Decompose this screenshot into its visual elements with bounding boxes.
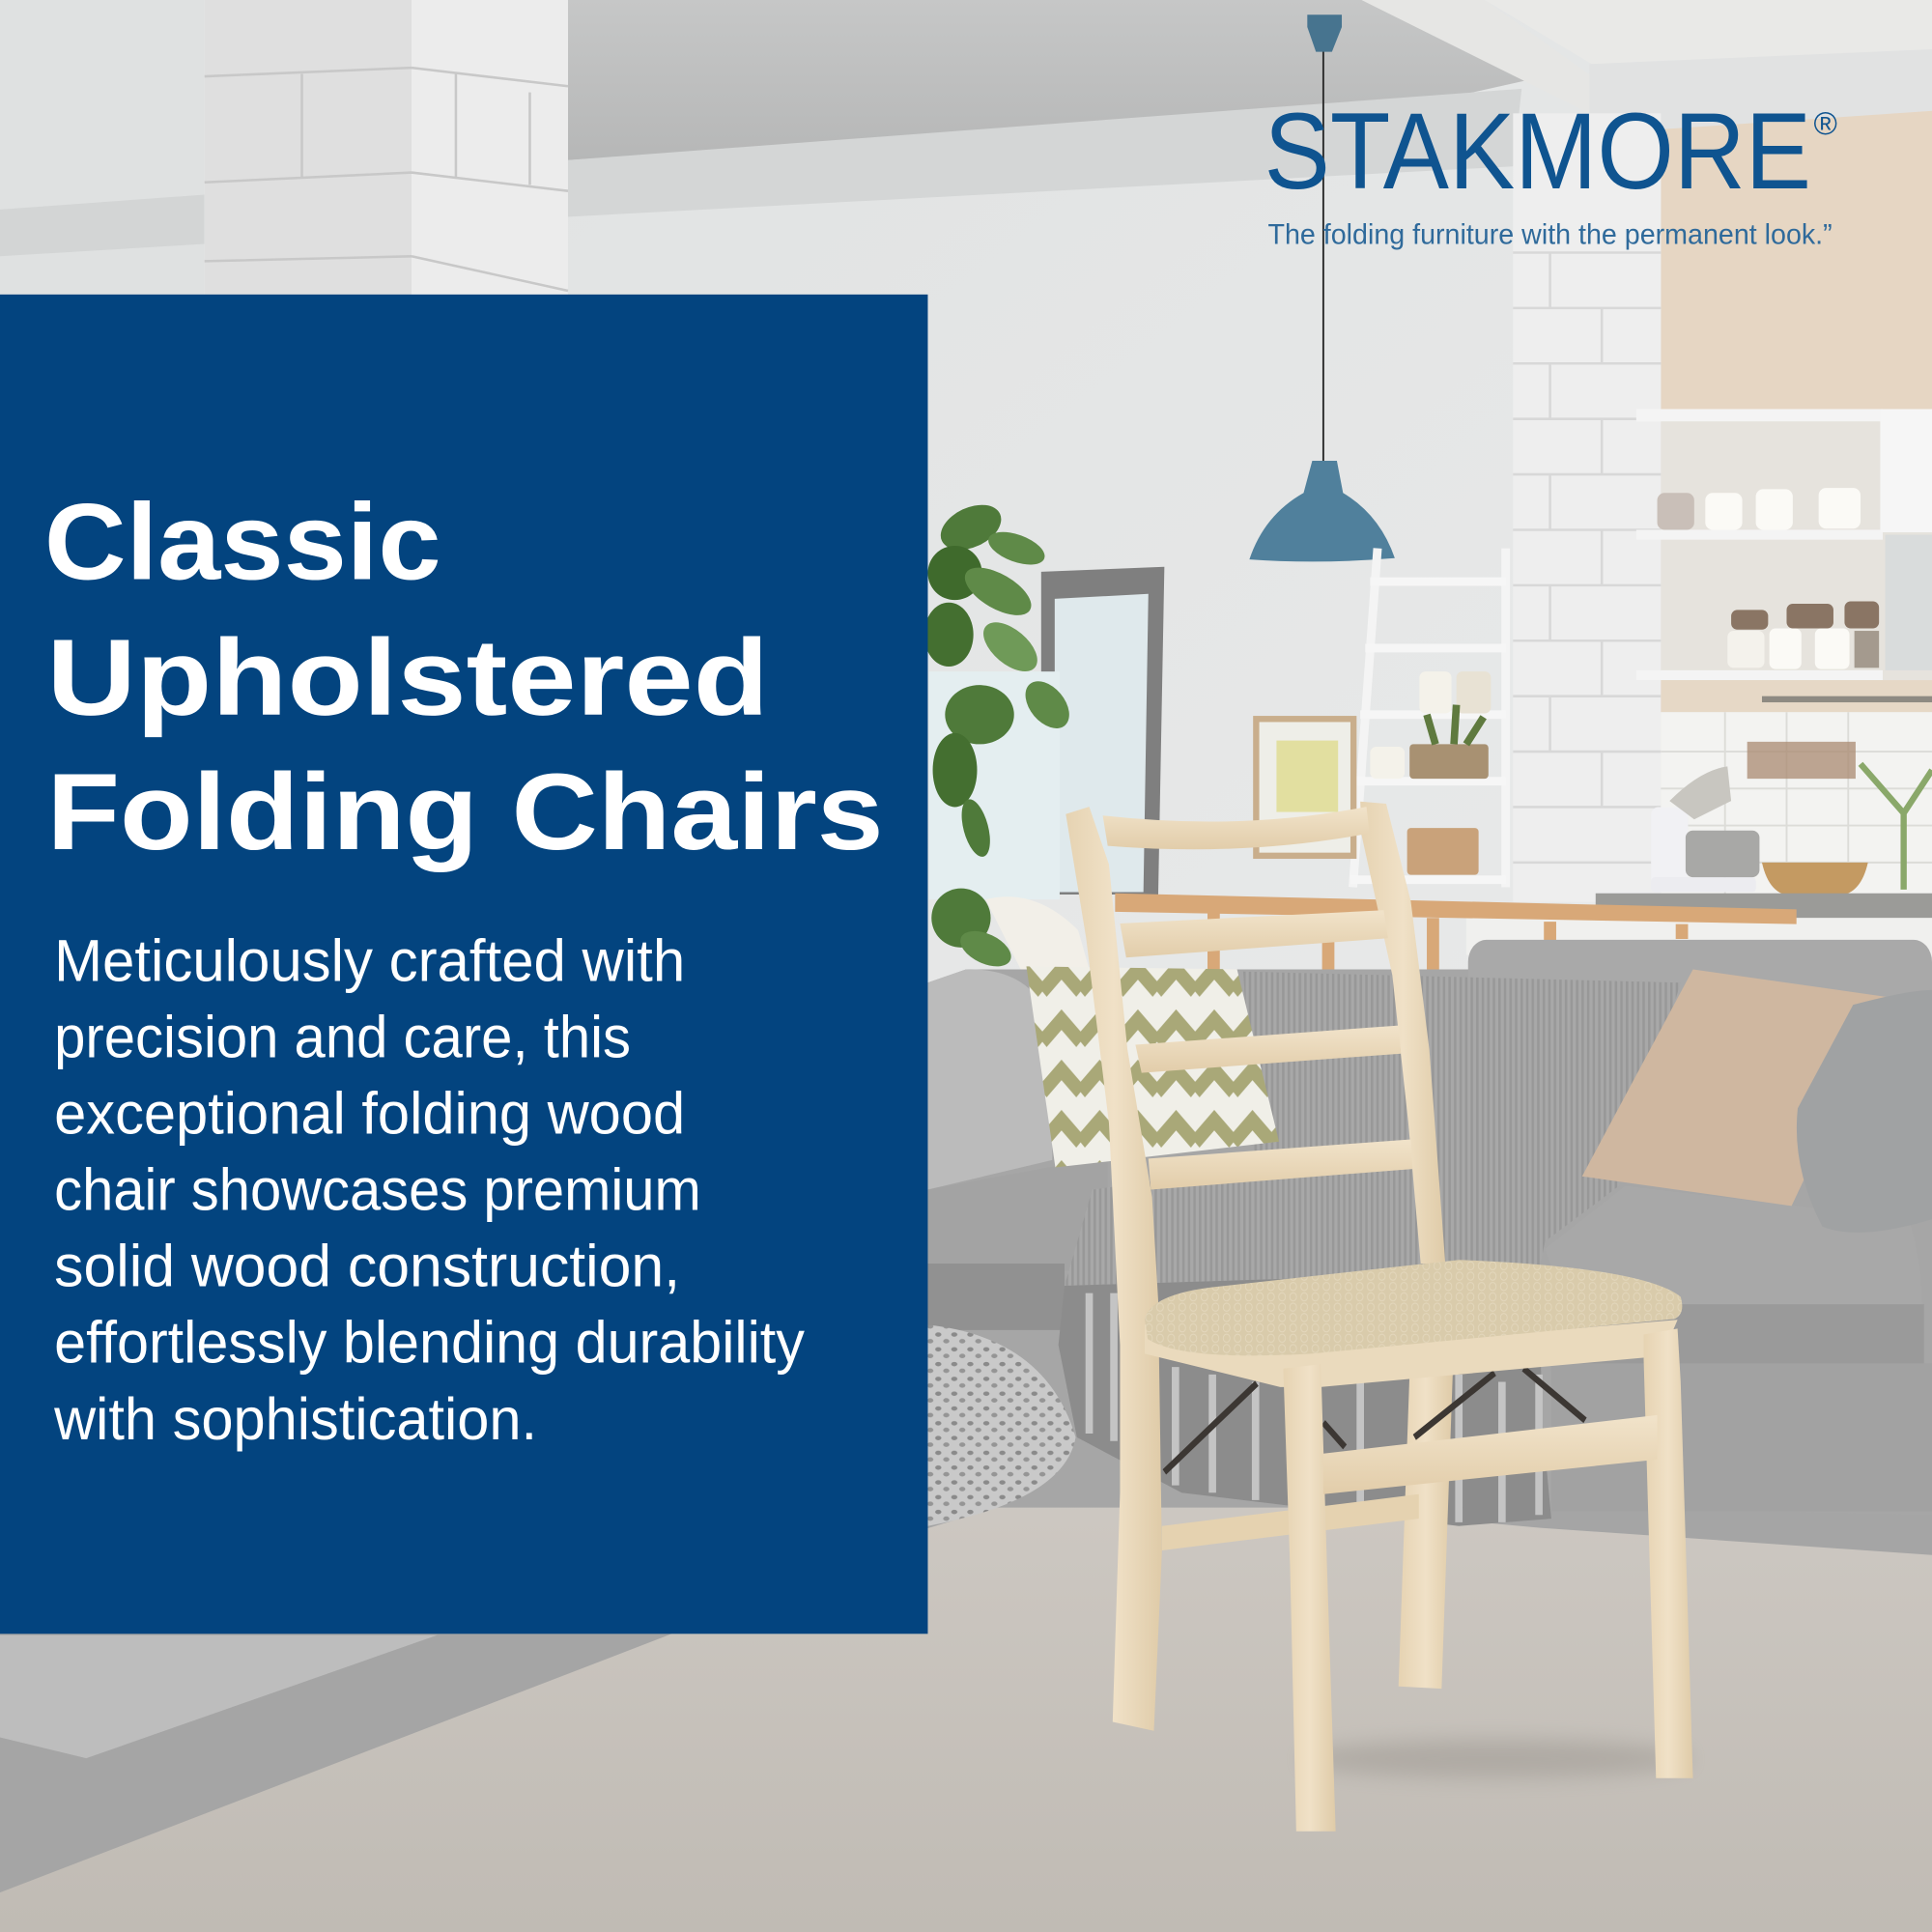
grey sofa [927,940,1932,1515]
title: Folding Chairs [46,751,884,872]
ladder shelf [1346,549,1506,887]
blue text panel [0,295,927,1634]
right ceiling [1485,0,1932,64]
chair [1065,802,1693,1832]
ceiling beam [567,89,1521,216]
knitted pouf [927,1325,1076,1526]
kitchen counter [1596,894,1932,918]
sofa and chair layer [927,802,1932,1832]
left ceiling area [0,0,205,296]
backsplash [1661,680,1932,895]
rug [0,1485,1932,1932]
description: Meticulously crafted with [54,927,685,993]
description: with sophistication. [53,1386,537,1452]
knitted throw [1059,972,1681,1526]
peach wall [1661,111,1932,419]
title [44,480,884,872]
third slat [1135,1026,1401,1073]
title: Classic [44,480,441,602]
top slat [1103,807,1370,849]
logo [1264,90,1837,251]
foreground sofa corner [0,1635,438,1758]
seat frame [1145,1320,1678,1387]
second slat [1120,910,1388,957]
kitchen shelves [1636,409,1932,680]
description: solid wood construction, [54,1234,680,1299]
stand mixer [1651,766,1759,892]
chair shadow [1298,1740,1693,1778]
description: chair showcases premium [54,1157,701,1223]
brick column right [1513,113,1661,902]
kitchen wall [1661,419,1932,912]
bread basket [1762,863,1868,895]
logo tagline: The folding furniture with the permanent look.” [1267,219,1833,251]
logo wordmark: STAKMORE [1264,90,1811,212]
beige pillow [1582,969,1890,1206]
dining table [1115,894,1797,974]
dining chair behind sofa [985,896,1091,974]
pendant lamp [1249,14,1395,561]
front left leg [1283,1364,1336,1832]
chevron pillow [1026,966,1279,1168]
side cushion [1797,990,1932,1233]
ceiling [567,0,1528,160]
upper right wall band [1589,49,1932,135]
rear right leg [1399,1375,1453,1689]
picture frame [1253,716,1356,859]
floor [0,1441,1932,1932]
left back post [1065,807,1162,1731]
fourth slat [1149,1139,1412,1190]
right back post [1360,802,1445,1264]
description: effortlessly blending durability [54,1310,805,1376]
metal brackets [1164,1369,1585,1472]
upholstered seat [1145,1260,1682,1355]
indoor plant [924,496,1078,974]
registered mark: ® [1814,106,1837,142]
brick column left [205,0,568,296]
wall mirror [929,567,1164,899]
front stretcher [1323,1415,1658,1494]
description [53,927,805,1452]
front right leg [1644,1328,1693,1778]
herb plant [1861,764,1932,890]
description: precision and care, this [54,1004,631,1069]
rear stretcher [1162,1494,1419,1550]
title: Upholstered [46,616,769,738]
diagonal beam [1361,0,1592,113]
description: exceptional folding wood [54,1080,685,1146]
